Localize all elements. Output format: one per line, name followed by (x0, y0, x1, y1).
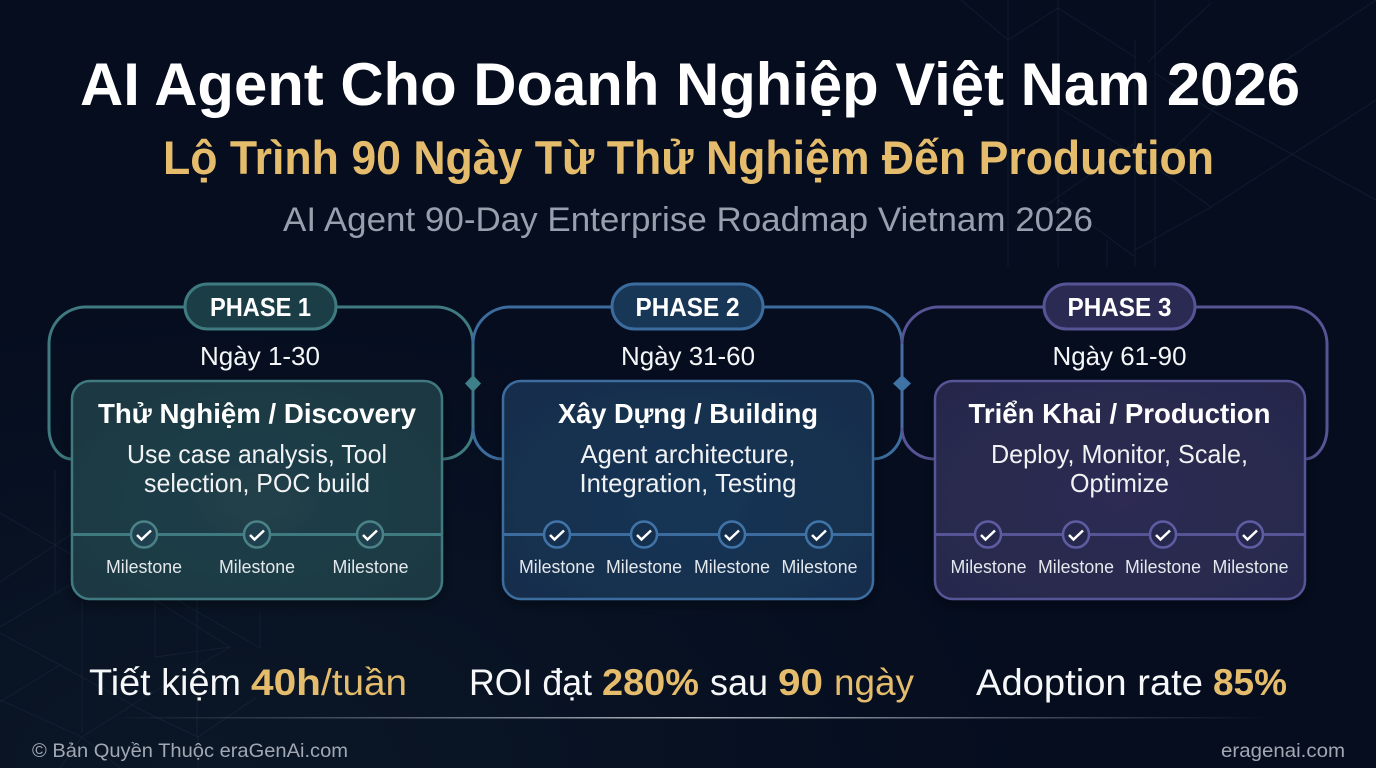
phase 1 badge: PHASE 1 (210, 294, 311, 322)
stat: ROI: ROI đạt (469, 661, 593, 703)
phase 3 badge (1044, 284, 1195, 329)
stat: ROI (469, 661, 914, 703)
connector node 2 (893, 375, 911, 392)
phase 1 badge (185, 284, 336, 329)
phase 2 badge: PHASE 2 (636, 294, 740, 322)
phase 3 card (935, 381, 1305, 599)
phase 1 description (127, 439, 387, 498)
phase 3 badge: PHASE 3 (1068, 294, 1172, 322)
phase 1 card (72, 381, 442, 599)
phase 2 milestone timeline: Milestone (694, 557, 770, 577)
phase 3 heading: Triển Khai / Production (968, 398, 1270, 429)
connector node 1 (465, 375, 481, 392)
website: eragenai.com (1221, 740, 1345, 762)
shared connector stem 2 (900, 344, 904, 428)
phase 1 description: selection, POC build (144, 468, 370, 498)
phase 3 milestone timeline (936, 522, 1304, 577)
phase 3 milestone timeline: Milestone (1125, 557, 1201, 577)
phase 2 heading: Xây Dựng / Building (558, 398, 818, 429)
stat: ROI: sau (710, 661, 768, 703)
shared connector stem 1 (472, 344, 474, 428)
phase 2 milestone timeline: Milestone (782, 557, 858, 577)
stat: hours saved: Tiết kiệm (89, 661, 241, 703)
phase 2 dates: Ngày 31-60 (621, 341, 755, 371)
phase 2 description: Agent architecture, (580, 439, 796, 469)
phase 2 badge (612, 284, 763, 329)
phase 2 milestone timeline: Milestone (606, 557, 682, 577)
panel: phase 3 (935, 284, 1305, 599)
stat: adoption rate: 85% (1213, 661, 1287, 703)
subtitle: Lộ Trình 90 Ngày Từ Thử Nghiệm Đến Production (163, 131, 1214, 184)
phase 2 description: Integration, Testing (580, 468, 796, 498)
phase 2 connector frame (473, 307, 902, 459)
phase 1 connector frame (49, 307, 473, 459)
phase 3 description: Optimize (1070, 468, 1169, 498)
copyright: © Bản Quyền Thuộc eraGenAi.com (32, 740, 348, 762)
phase 2 description (580, 439, 796, 498)
title: AI Agent Cho Doanh Nghiệp Việt Nam 2026 (80, 51, 1300, 118)
phase 2 milestone timeline (504, 522, 872, 577)
stat: hours saved: 40h (251, 661, 321, 703)
english subtitle: AI Agent 90-Day Enterprise Roadmap Vietnam 2026 (283, 201, 1093, 239)
phase 3 description: Deploy, Monitor, Scale, (991, 439, 1248, 469)
phase 3 milestone timeline: Milestone (1038, 557, 1114, 577)
phase 3 description (991, 439, 1248, 498)
phase 1 milestone timeline (73, 522, 441, 577)
phase 3 milestone timeline: Milestone (950, 557, 1026, 577)
phase 3 dates: Ngày 61-90 (1052, 341, 1186, 371)
phase 3 connector frame (902, 307, 1327, 459)
phase 1 description: Use case analysis, Tool (127, 439, 387, 469)
stat: ROI: 90 (778, 661, 823, 703)
stat: ROI: 280% (602, 661, 699, 703)
stat: hours saved: /tuần (321, 661, 407, 703)
stat: adoption rate: Adoption rate (976, 661, 1203, 703)
phase 2 card (503, 381, 873, 599)
stat: ROI: ngày (834, 661, 914, 703)
phase 1 dates: Ngày 1-30 (200, 341, 320, 371)
phase 1 milestone timeline: Milestone (106, 557, 182, 577)
phase 2 milestone timeline: Milestone (519, 557, 595, 577)
stat: hours saved (89, 661, 407, 703)
panel: phase 1 (72, 284, 442, 599)
phase 1 milestone timeline: Milestone (332, 557, 408, 577)
panel: phase 2 (503, 284, 873, 599)
phase 1 heading: Thử Nghiệm / Discovery (98, 398, 416, 429)
phase 3 milestone timeline: Milestone (1212, 557, 1288, 577)
phase 1 milestone timeline: Milestone (219, 557, 295, 577)
